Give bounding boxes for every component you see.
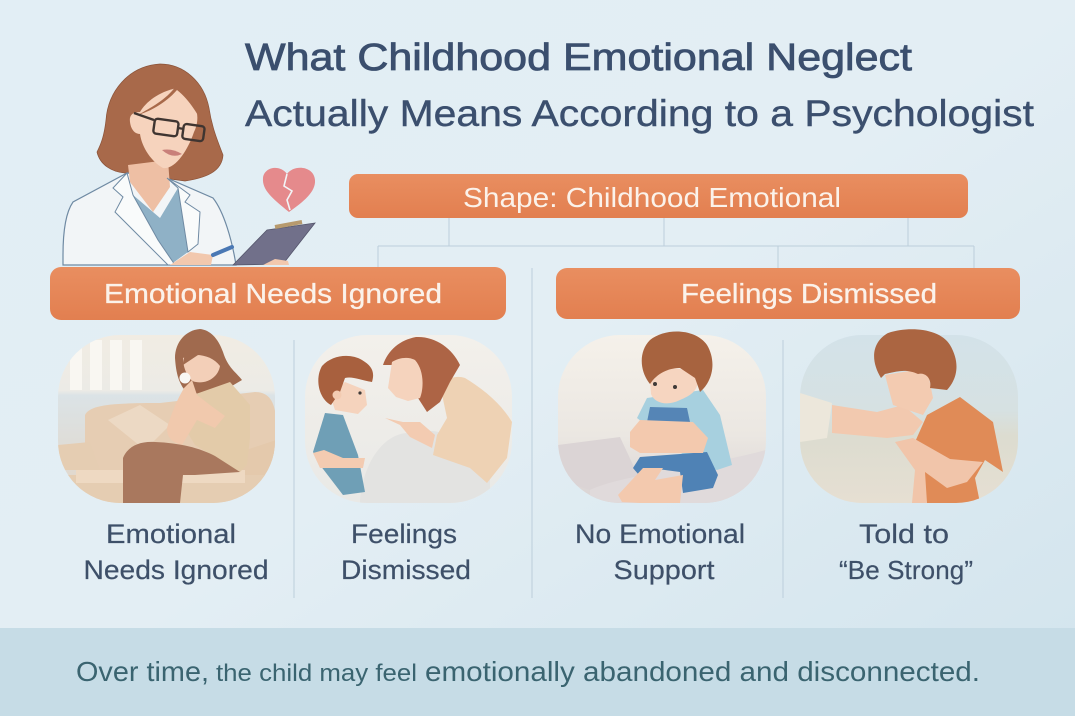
footer text: emotionally abandoned and disconnected.: [425, 656, 980, 687]
title: Actually Means According to a Psychologist: [245, 93, 1035, 134]
caption: feelings dismissed: Feelings: [351, 519, 457, 549]
caption: told to be strong: Told to: [859, 519, 949, 549]
footer band: [0, 628, 1075, 716]
panel: emotional needs ignored illustration: [58, 329, 276, 503]
banner: Feelings Dismissed: [556, 268, 1020, 319]
caption: emotional needs ignored: Needs Ignored: [84, 555, 268, 585]
banner: Emotional Needs Ignored: [50, 267, 506, 320]
glasses: [134, 113, 205, 141]
caption: feelings dismissed: Dismissed: [341, 555, 471, 585]
caption: emotional needs ignored: [84, 519, 268, 585]
caption: feelings dismissed: [341, 519, 471, 585]
caption: no emotional support: [575, 519, 745, 585]
panel: told to be strong illustration: [800, 329, 1018, 503]
title: What Childhood Emotional Neglect: [245, 37, 912, 79]
footer text: [76, 656, 980, 687]
connector lines: [294, 217, 974, 598]
panel: no emotional support illustration: [558, 332, 766, 503]
caption: emotional needs ignored: Emotional: [106, 519, 236, 549]
icon: broken heart: [263, 168, 315, 212]
caption: told to be strong: “Be Strong”: [839, 555, 973, 585]
top banner: Shape: Childhood Emotional: [349, 174, 968, 218]
caption: no emotional support: No Emotional: [575, 519, 745, 549]
banner: Emotional Needs Ignored: Emotional Needs Ignored: [104, 278, 442, 309]
illustration: psychologist with clipboard: [63, 64, 315, 265]
banner: Feelings Dismissed: Feelings Dismissed: [681, 278, 937, 309]
panel: feelings dismissed illustration: [305, 335, 512, 503]
footer text: the child may feel: [216, 660, 417, 687]
caption: told to be strong: [839, 519, 973, 585]
footer text: Over time,: [76, 656, 209, 687]
caption: no emotional support: Support: [614, 555, 715, 585]
top banner: Shape: Childhood Emotional: Shape: Childhood Emotional: [463, 182, 841, 213]
title: [245, 37, 1035, 134]
